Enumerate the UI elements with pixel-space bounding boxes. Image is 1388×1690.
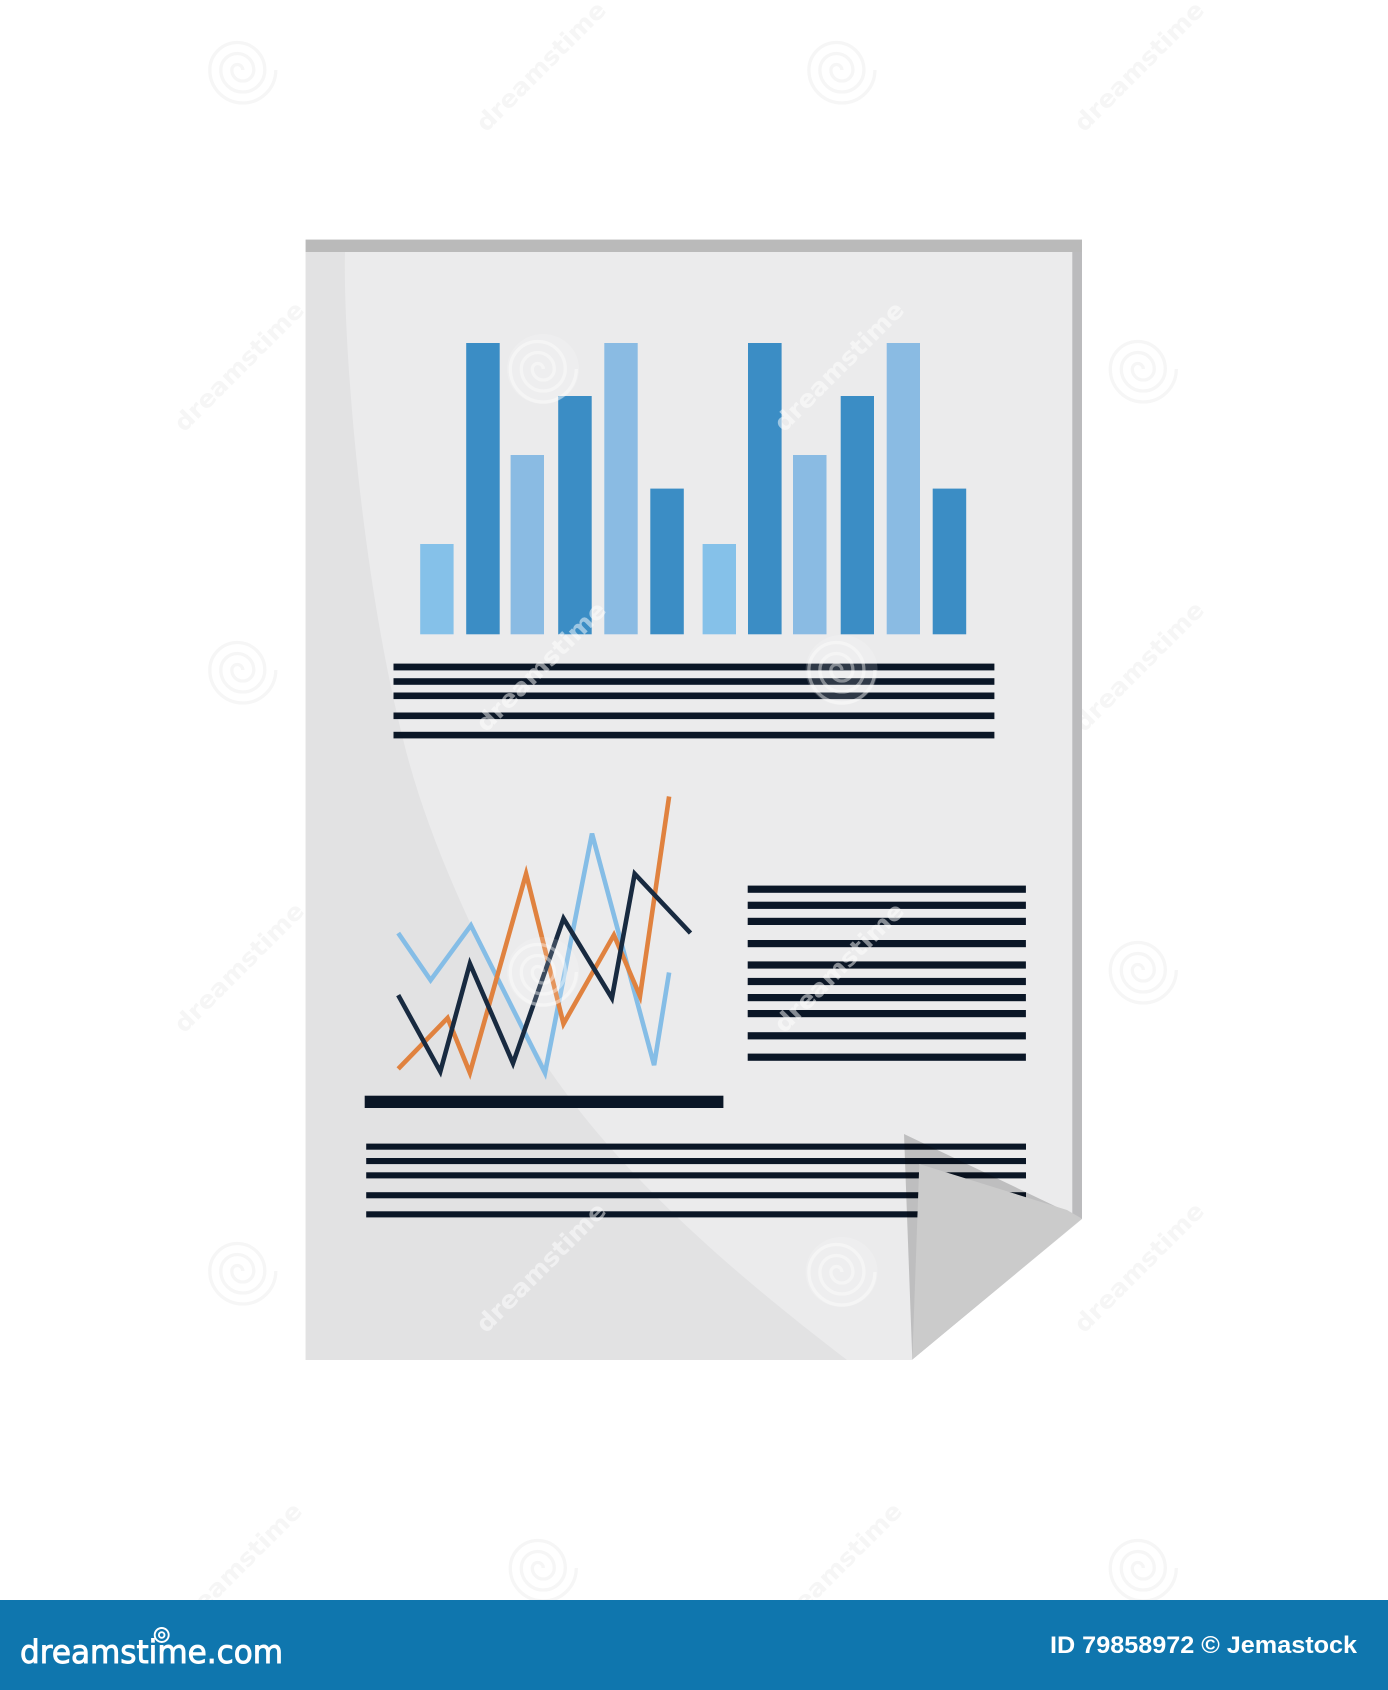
footer credit: ID 79858972 © Jemastock	[1050, 1632, 1358, 1659]
watermarks on paper	[470, 296, 910, 1338]
faint watermarks on background: dreamstime	[168, 296, 310, 437]
line chart	[398, 796, 690, 1073]
faint watermarks on background	[166, 0, 1210, 1638]
logo spiral	[155, 1628, 169, 1642]
watermarks on paper: dreamstime	[768, 296, 910, 437]
folded corner	[904, 1134, 1082, 1360]
faint watermarks on background: dreamstime	[168, 897, 310, 1038]
faint watermarks on background: dreamstime	[1068, 0, 1210, 137]
orange series	[398, 796, 669, 1073]
faint watermarks on background: dreamstime	[470, 0, 612, 137]
watermarks on paper: dreamstime	[768, 897, 910, 1038]
text block right of line chart	[748, 886, 1026, 1061]
light blue series	[398, 834, 669, 1073]
faint watermarks on background: dreamstime	[166, 1497, 308, 1638]
paper base	[306, 240, 1082, 1360]
faint watermarks on background: dreamstime	[1068, 1197, 1210, 1338]
dark series	[398, 874, 690, 1072]
faint watermarks on background: dreamstime	[1068, 596, 1210, 737]
fold flap	[912, 1164, 1082, 1360]
footer logo: dreamstime.com	[20, 1633, 283, 1671]
text lines under bar chart	[394, 664, 994, 738]
bar chart	[420, 343, 966, 634]
footer bar	[0, 1600, 1388, 1690]
watermarks on paper: dreamstime	[470, 1197, 612, 1338]
panel: paper sheet	[306, 240, 1082, 1360]
top edge	[306, 240, 1082, 252]
faint watermarks on background: dreamstime	[766, 1497, 908, 1638]
bottom text block	[366, 1144, 1026, 1217]
thick heading bar	[365, 1096, 723, 1108]
watermarks on paper: dreamstime	[470, 596, 612, 737]
fold shadow	[904, 1134, 1082, 1360]
right edge	[1072, 252, 1082, 1219]
curved paper shade	[306, 252, 847, 1360]
